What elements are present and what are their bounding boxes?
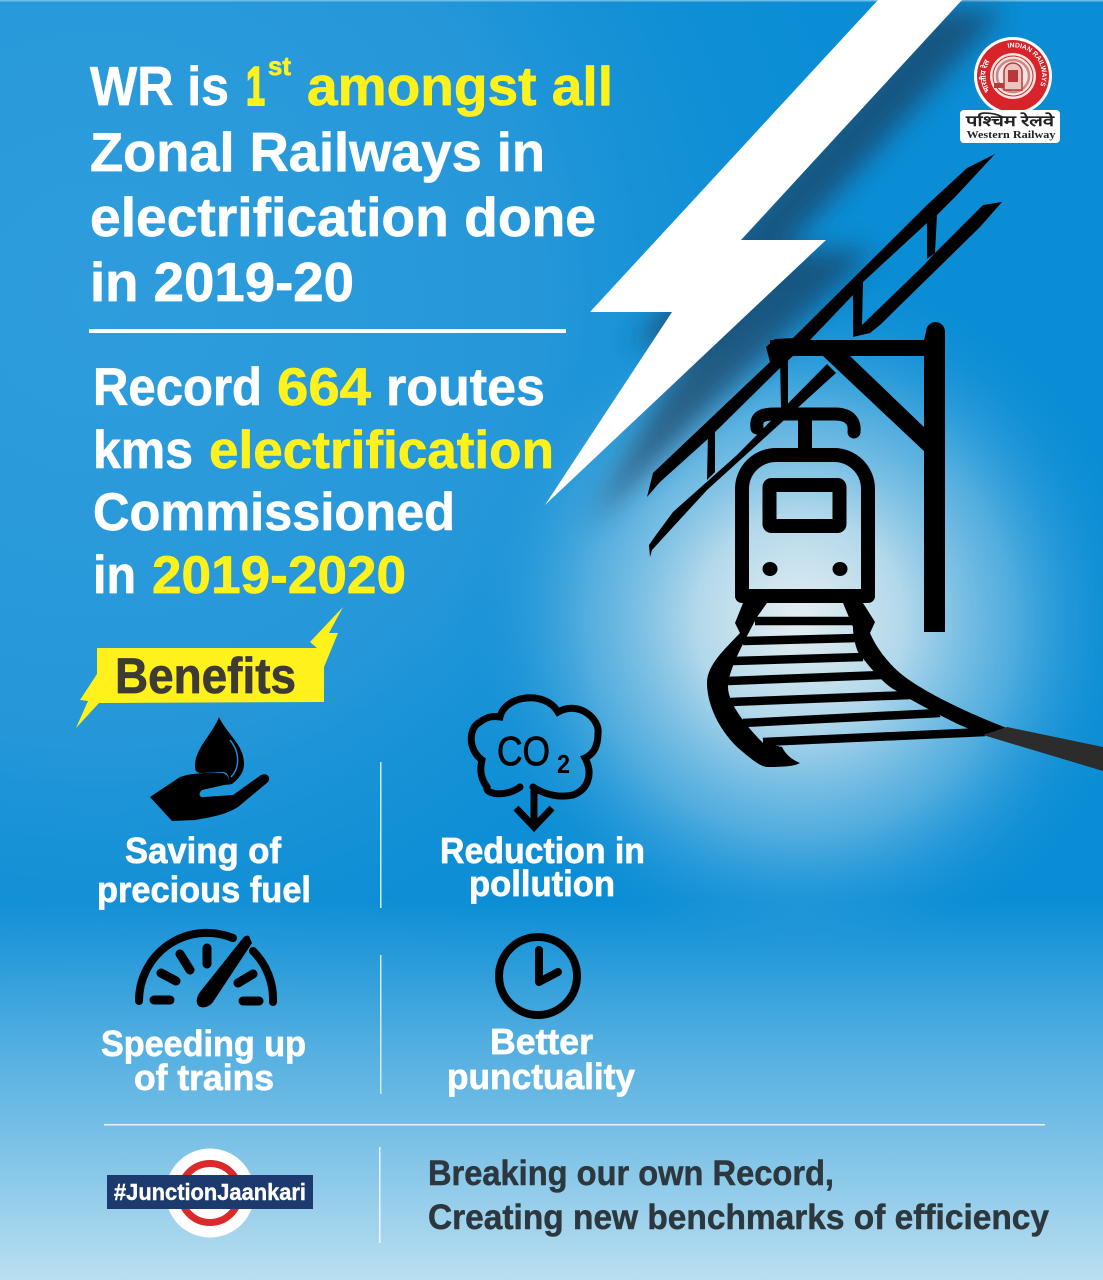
tagline: Creating new benchmarks of efficiency	[428, 1198, 1050, 1237]
benefit: saving of precious fuel	[97, 830, 311, 910]
benefit: better punctuality: punctuality	[447, 1056, 635, 1097]
subtitle: record electrification: electrification	[209, 421, 554, 480]
train body	[742, 455, 868, 596]
title: electrification done	[90, 186, 596, 248]
track tail	[983, 727, 1103, 771]
benefit: reduction in pollution: pollution	[469, 863, 615, 904]
benefit: speeding up of trains: Speeding up	[101, 1023, 306, 1064]
track right rail	[843, 603, 1007, 735]
tagline	[428, 1154, 1050, 1237]
gantry brace	[823, 356, 926, 453]
title: amongst all	[307, 55, 613, 117]
lower catenary wire	[649, 364, 836, 557]
train window	[770, 485, 840, 526]
benefit: reduction in pollution	[440, 830, 645, 904]
icon: fuel drop on hand	[150, 717, 269, 821]
benefits banner	[76, 607, 343, 728]
logo: Western Railway: पश्चिम रेलवे	[965, 112, 1055, 130]
right catenary wire	[853, 202, 1002, 337]
train lights	[762, 562, 778, 576]
benefit: speeding up of trains: of trains	[134, 1057, 274, 1098]
benefit: saving of precious fuel: Saving of	[125, 830, 282, 871]
illustration: train under overhead wires	[647, 154, 1103, 771]
icon: clock	[499, 937, 577, 1015]
title: Zonal Railways in	[90, 121, 545, 183]
pantograph	[757, 414, 854, 432]
benefit: saving of precious fuel: precious fuel	[97, 869, 311, 910]
benefit: reduction in pollution: Reduction in	[440, 830, 645, 871]
logo: JunctionJaankari roundel: #JunctionJaankari	[114, 1179, 306, 1205]
icon: CO2 cloud with arrow	[471, 698, 598, 827]
logo: Western Railway: भारतीय रेल	[978, 59, 990, 93]
logo: Western Railway: Western Railway	[966, 130, 1056, 141]
hanger	[780, 358, 788, 408]
upper catenary wire	[647, 154, 995, 497]
subtitle: record electrification: Record	[93, 358, 262, 417]
benefit: better punctuality	[447, 1021, 635, 1097]
logo: Western Railway	[960, 37, 1060, 143]
subtitle: record electrification	[93, 358, 554, 605]
icon: CO2 cloud with arrow: 2	[557, 749, 570, 779]
gantry arm	[770, 340, 927, 356]
benefit: speeding up of trains	[101, 1023, 306, 1098]
gantry post	[924, 322, 945, 632]
subtitle: record electrification: 2019-2020	[152, 546, 406, 605]
track left rail	[707, 603, 800, 767]
title: in 2019-20	[90, 251, 354, 313]
subtitle: record electrification: 664	[277, 358, 372, 417]
tagline: Breaking our own Record,	[428, 1154, 834, 1193]
icon: CO2 cloud with arrow: CO	[497, 728, 550, 774]
logo: JunctionJaankari roundel	[107, 1148, 313, 1238]
logo: Western Railway: INDIAN RAILWAYS	[1008, 42, 1047, 86]
title: WR is	[90, 55, 229, 117]
subtitle: record electrification: in	[93, 546, 136, 605]
benefits banner: Benefits	[115, 648, 296, 704]
subtitle: record electrification: routes	[386, 358, 545, 417]
icon: speedometer	[139, 933, 273, 1007]
lightning bolt shadow	[590, 10, 1005, 525]
title: st	[268, 51, 291, 81]
title: 1	[246, 55, 265, 117]
subtitle: record electrification: kms	[93, 421, 193, 480]
title	[90, 51, 613, 313]
subtitle: record electrification: Commissioned	[93, 483, 455, 542]
benefit: better punctuality: Better	[490, 1021, 593, 1062]
track sleepers	[728, 621, 985, 742]
lightning bolt	[545, 0, 962, 505]
